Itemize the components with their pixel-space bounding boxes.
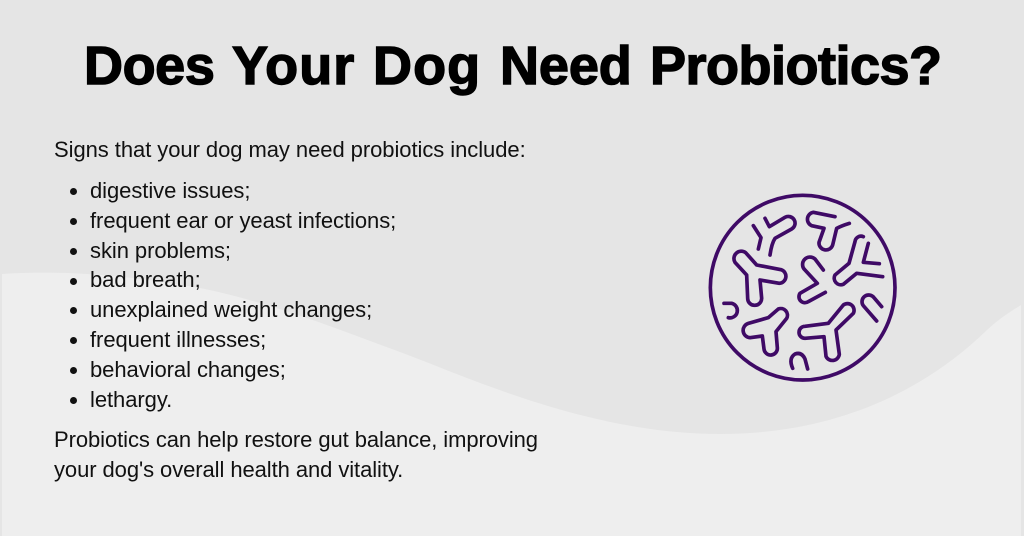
- title: Probiotics?: [650, 36, 942, 96]
- icon: probiotic bacteria in circle: [708, 194, 897, 382]
- list item: weight changes: unexplained weight changes;: [90, 297, 372, 322]
- closing paragraph: [54, 427, 538, 482]
- list item: frequent illnesses: frequent illnesses;: [90, 327, 266, 352]
- title: Need: [500, 36, 632, 96]
- title: [84, 36, 942, 96]
- intro text: Signs that your dog may need probiotics include:: [54, 137, 526, 162]
- list item: behavioral changes: behavioral changes;: [90, 357, 286, 382]
- list item: digestive issues: digestive issues;: [90, 178, 250, 203]
- list item: bad breath: bad breath;: [90, 267, 201, 292]
- title: Your: [232, 36, 355, 96]
- list item: lethargy: lethargy.: [90, 386, 172, 412]
- title: Dog: [373, 36, 481, 96]
- bullet list of signs: [70, 178, 396, 412]
- list item: skin problems: skin problems;: [90, 238, 231, 262]
- list item: ear or yeast infections: frequent ear or yeast infections;: [90, 208, 396, 233]
- closing paragraph: Probiotics can help restore gut balance, improving: [54, 427, 538, 452]
- title: Does: [84, 36, 214, 96]
- closing paragraph: your dog's overall health and vitality.: [54, 457, 403, 482]
